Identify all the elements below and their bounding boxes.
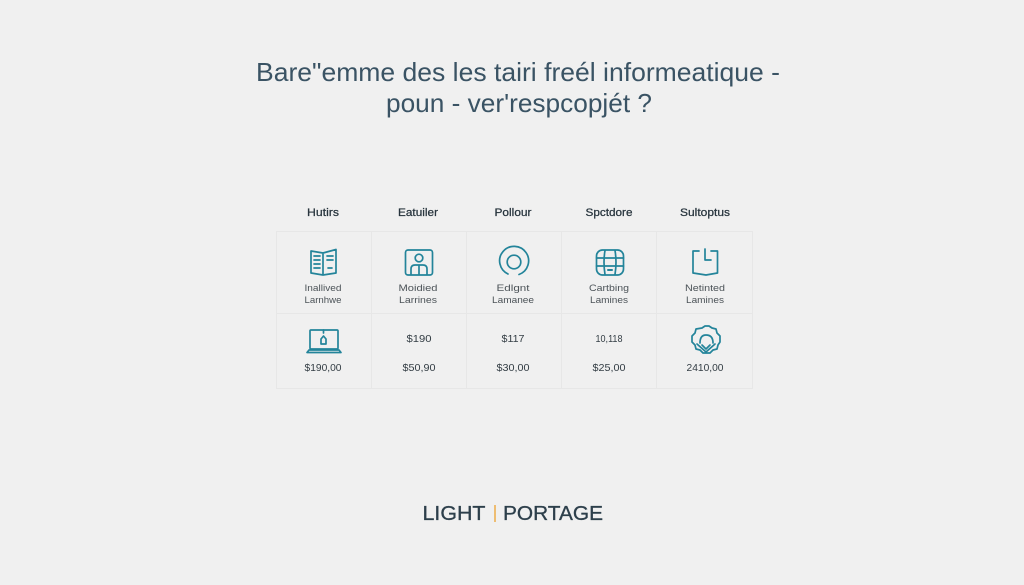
price row one: 10,118 [596, 333, 623, 345]
row labels [304, 283, 725, 306]
logo: Light Portage [422, 503, 603, 525]
row labels: Larrines [399, 295, 437, 306]
row labels: Larnhwe [304, 295, 342, 306]
title [256, 57, 780, 118]
icon: concentric circles [500, 246, 529, 274]
row labels: Lamines [590, 295, 628, 306]
column headers: Eatuiler [398, 207, 438, 219]
price row two: $30,00 [496, 362, 530, 374]
column headers: Hutirs [307, 207, 340, 219]
row labels: Netinted [685, 283, 725, 294]
icon: globe grid [596, 250, 624, 275]
logo: Light Portage: LIGHT [422, 503, 486, 525]
row labels: Inallived [304, 283, 342, 294]
price row one: $190 [406, 333, 432, 345]
pricing table [276, 207, 752, 388]
column headers: Pollour [494, 207, 532, 219]
column headers: Sultoptus [680, 207, 731, 219]
icon: laptop [307, 330, 341, 352]
price row two: 2410,00 [686, 362, 724, 374]
price row two: $25,00 [592, 362, 626, 374]
price row two: $190,00 [304, 362, 342, 374]
logo: Light Portage: PORTAGE [503, 503, 603, 525]
row labels: Moidied [398, 283, 438, 294]
column headers: Spctdore [586, 207, 632, 219]
row labels: Lamanee [492, 295, 534, 306]
icon: person card [406, 250, 432, 275]
price row one [406, 333, 623, 345]
row labels: Edlgnt [496, 283, 530, 294]
table grid [276, 232, 752, 388]
title: poun - ver'respcopjét ? [386, 88, 652, 118]
price row two: $50,90 [402, 362, 436, 374]
icon: box with clock hand [693, 249, 718, 275]
column headers [307, 207, 731, 219]
row labels: Lamines [686, 295, 724, 306]
icon: gear [692, 326, 720, 353]
price row two [304, 362, 724, 374]
icon: open book [311, 250, 336, 275]
row labels: Cartbing [589, 283, 629, 294]
price row one: $117 [502, 333, 525, 345]
title: Bare"emme des les tairi freél informeatique - [256, 57, 780, 87]
